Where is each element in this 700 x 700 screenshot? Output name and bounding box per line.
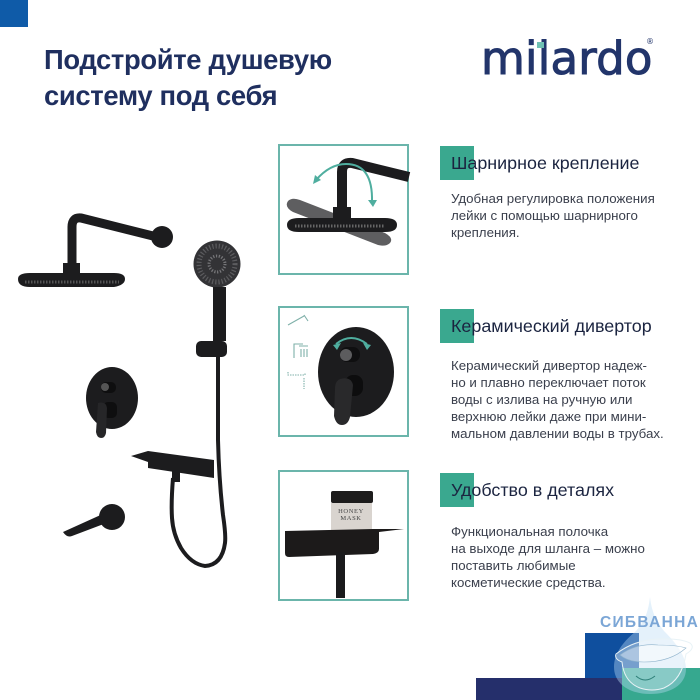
title: систему под себя: [44, 80, 277, 111]
panel 2 illustration: [318, 327, 394, 425]
title: [44, 44, 332, 111]
panel 3 illustration: MASK: [340, 515, 362, 522]
corner block: [0, 0, 28, 27]
text: details: косметические средства.: [451, 575, 606, 590]
heading: hinge: Шарнирное крепление: [451, 153, 640, 173]
panel frame: diverter: [278, 306, 409, 437]
teal square: diverter: [440, 309, 474, 343]
jar label: HONEY: [338, 508, 364, 515]
text: details: Функциональная полочка: [451, 524, 608, 539]
text: details: поставить любимые: [451, 558, 576, 573]
text: diverter: Керамический дивертор надеж-: [451, 358, 647, 373]
text: hinge: лейки с помощью шарнирного: [451, 208, 638, 223]
product: rain shower with arm: [18, 218, 173, 287]
text: hinge: крепления.: [451, 225, 520, 240]
logo: milardo: milardo: [481, 32, 653, 85]
text: diverter: [451, 358, 664, 441]
heading: details: Удобство в деталях: [451, 480, 614, 500]
product: spout: [63, 504, 125, 536]
text: diverter: мальном давлении воды в трубах.: [451, 426, 664, 441]
panel 2 mode icons: [288, 315, 308, 389]
product: hand shower with hose: [172, 240, 240, 566]
panel frame: shelf: [278, 470, 409, 601]
text: diverter: но и плавно переключает поток: [451, 375, 646, 390]
text: hinge: Удобная регулировка положения: [451, 191, 655, 206]
panel 3 illustration: [285, 491, 404, 598]
text: diverter: верхнюю лейки даже при мини-: [451, 409, 646, 424]
product: mixer: [86, 367, 138, 438]
watermark text: СИБВАННА: [600, 614, 699, 631]
product: shelf: [131, 451, 214, 482]
teal square: details: [440, 473, 474, 507]
logo: milardo: ®: [646, 37, 654, 46]
text: details: на выходе для шланга – можно: [451, 541, 645, 556]
text: details: [451, 524, 645, 590]
bottom decorative blocks: [476, 633, 700, 700]
text: diverter: воды с излива на ручную или: [451, 392, 632, 407]
panel 1 illustration: [287, 163, 409, 246]
heading: diverter: Керамический дивертор: [451, 316, 652, 336]
title: Подстройте душевую: [44, 44, 332, 75]
text: hinge: [451, 191, 655, 240]
panel frame: hinge: [278, 144, 409, 275]
teal square: hinge: [440, 146, 474, 180]
